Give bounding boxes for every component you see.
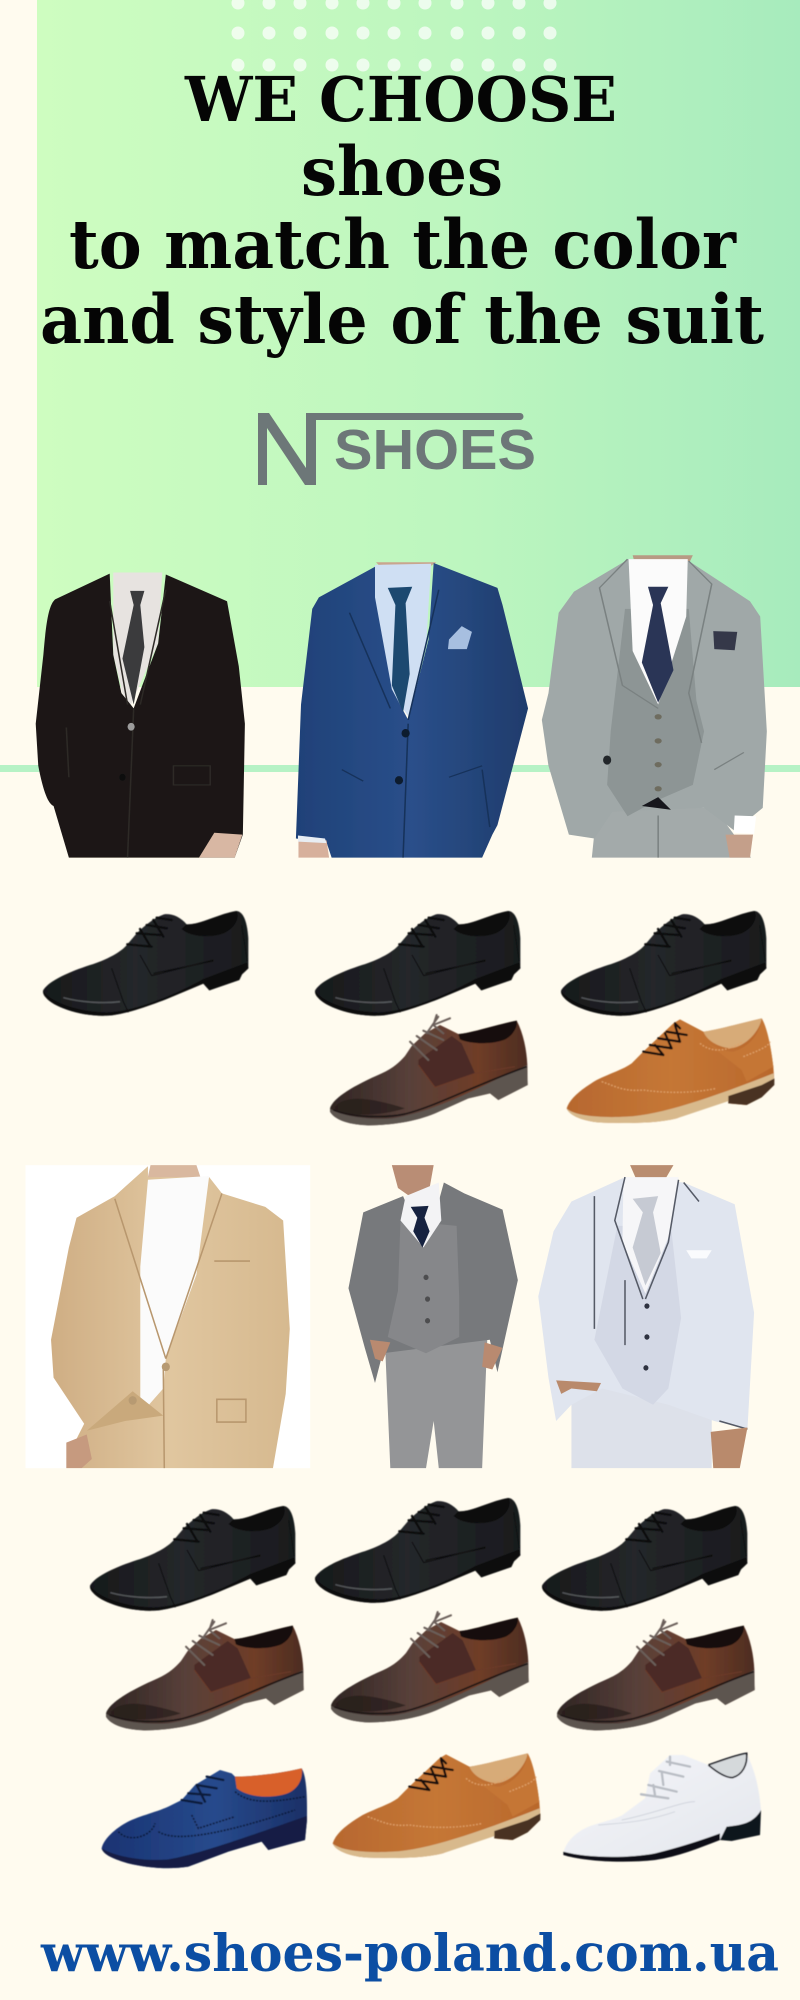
green header panel <box>37 0 800 687</box>
website url: www.shoes-poland.com.ua <box>40 1924 779 1984</box>
suit: grey three-piece <box>542 555 767 858</box>
title: shoes <box>301 132 503 211</box>
shoe: brown, left <box>106 1620 304 1730</box>
shoe: black, centre <box>315 1498 520 1603</box>
title <box>40 63 764 359</box>
shoe: navy brogue <box>102 1768 307 1868</box>
shoe: tan, under grey suit <box>567 1018 774 1123</box>
suit: grey with navy tie <box>348 1165 518 1468</box>
title: WE CHOOSE <box>184 63 617 136</box>
suit: beige on white box <box>26 1165 310 1468</box>
shoe: black, right <box>542 1506 747 1611</box>
shoe: black, left <box>90 1506 295 1611</box>
shoes row 1: black shoes and brown and tan options <box>43 911 774 1125</box>
suit: white and light grey <box>538 1165 754 1468</box>
green horizontal strip <box>0 765 800 772</box>
shoes rows 2-4 <box>90 1498 761 1868</box>
logo: N SHOES: SHOES <box>334 418 536 482</box>
shoe: black, under black suit <box>43 911 248 1016</box>
shoe: brown, right <box>557 1620 755 1730</box>
dot pattern <box>232 0 556 72</box>
logo: N SHOES <box>258 413 536 485</box>
shoe: brown, under blue suit <box>330 1015 528 1125</box>
suit: black <box>36 573 245 858</box>
title: and style of the suit <box>40 280 764 359</box>
shoe: black, under blue suit <box>315 911 520 1016</box>
shoe: black, under grey suit <box>561 911 766 1016</box>
shoe: brown, centre <box>331 1612 529 1722</box>
shoe: tan brogue <box>333 1753 540 1858</box>
title: to match the color <box>69 205 737 284</box>
shoe: white <box>563 1753 761 1862</box>
suit: navy blue <box>296 562 528 858</box>
